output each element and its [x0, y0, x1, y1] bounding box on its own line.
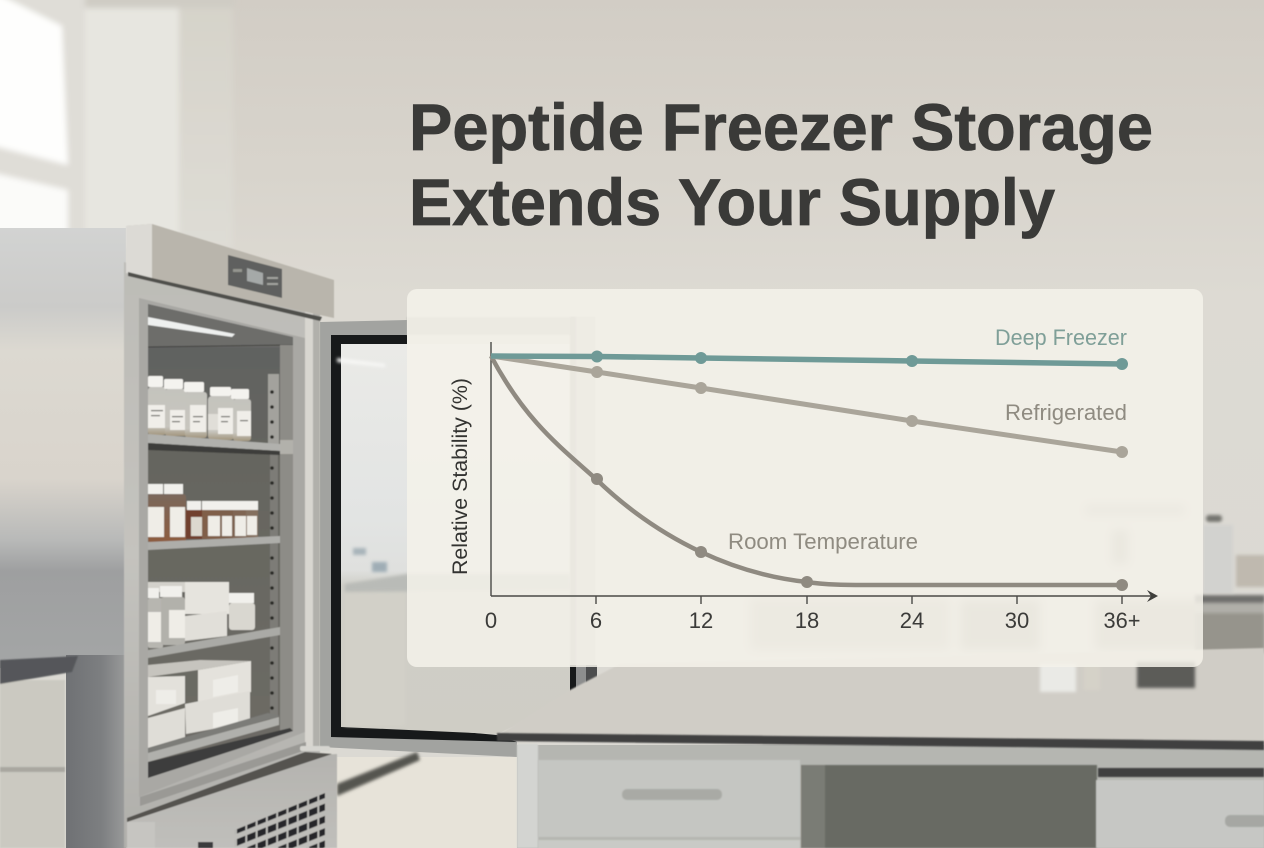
x axis tick labels: 0 [485, 608, 497, 633]
freezer cabinet [124, 224, 337, 848]
shelf 2 [148, 536, 280, 550]
title: Extends Your Supply [409, 165, 1055, 239]
axes with arrow [491, 342, 1158, 604]
line: refrigerated [491, 356, 1128, 458]
interior [148, 304, 293, 778]
y axis label: Relative Stability (%) [449, 378, 472, 575]
blurred reflection in the glass [337, 358, 570, 726]
x axis tick labels: 30 [1005, 608, 1029, 633]
door right frame below the card [570, 665, 597, 695]
top cap with control panel [126, 224, 334, 321]
door top band seen through the card [407, 317, 595, 335]
rail holes [270, 390, 274, 710]
label: deep freezer: Deep Freezer [995, 325, 1127, 350]
door hinge [300, 746, 330, 751]
inner door frame [139, 298, 305, 797]
shelf rail [268, 374, 279, 450]
x axis tick labels: 36+ [1104, 608, 1140, 633]
panel: chart card [407, 289, 1203, 667]
left drawer [538, 760, 800, 848]
x axis tick labels: 12 [689, 608, 713, 633]
x axis tick labels: 18 [795, 608, 819, 633]
control display [228, 255, 282, 298]
shelf 3 boxes and bottles [148, 582, 255, 648]
label: refrigerated: Refrigerated [1005, 400, 1127, 425]
front frame [124, 262, 320, 848]
label: room temperature: Room Temperature [728, 529, 918, 554]
title [409, 90, 1153, 239]
items on the table [1040, 662, 1195, 692]
door glass [341, 344, 570, 734]
title: Peptide Freezer Storage [409, 90, 1153, 164]
shelf 4 boxes [148, 660, 251, 748]
open freezer glass door [320, 317, 597, 757]
x axis tick labels [485, 608, 1140, 633]
shelf 1 bottles [148, 376, 251, 441]
compressor vent grille [235, 793, 325, 848]
floor [330, 757, 530, 848]
open knee space [801, 765, 1097, 848]
frame lower steel band [140, 742, 306, 806]
floor baseboard shadow [337, 752, 420, 796]
shelf 4 [148, 713, 270, 752]
shelf 3 [148, 627, 280, 658]
x axis tick labels: 6 [590, 608, 602, 633]
lab table in the foreground [497, 648, 1264, 848]
door right frame [570, 317, 595, 667]
faint fixtures behind the chart card [750, 505, 1203, 650]
back counter on the right [1195, 515, 1264, 653]
right drawer [1096, 768, 1264, 848]
door outer frame [320, 320, 517, 757]
table leg [517, 744, 538, 848]
door black gasket [331, 335, 517, 742]
x axis tick labels: 24 [900, 608, 924, 633]
side walls and window [0, 0, 235, 248]
left counter [0, 228, 126, 848]
table top [497, 648, 1264, 745]
table dark edge [497, 733, 1264, 750]
line: deep freezer [491, 350, 1128, 370]
lower compressor unit [127, 746, 337, 848]
line: room temperature [491, 356, 1128, 591]
shelf 1 [148, 434, 280, 451]
shelf 2 bottles [148, 484, 258, 542]
